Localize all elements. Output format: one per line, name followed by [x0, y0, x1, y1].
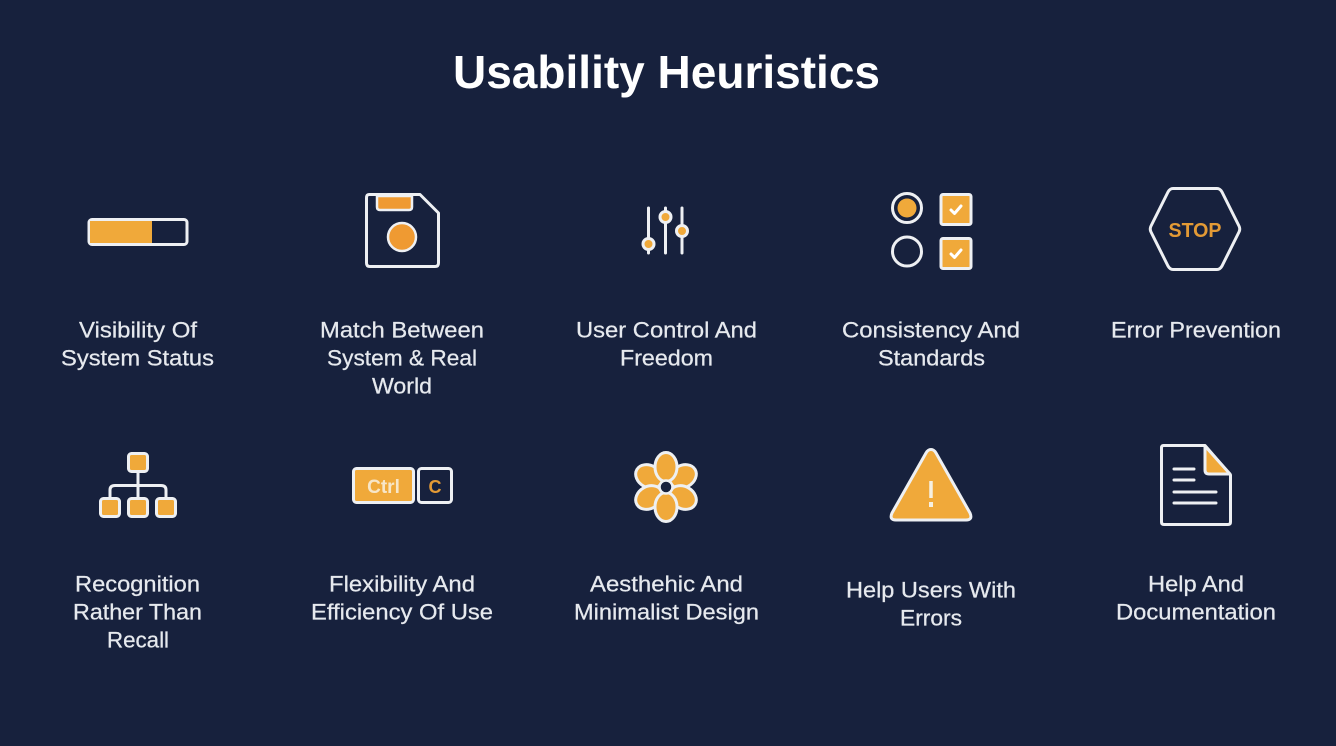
- label: aesthetic and minimalist design: [574, 572, 759, 624]
- icon: flower: [631, 452, 701, 522]
- label: help users with errors: Errors: [900, 606, 962, 630]
- label: visibility of system status: Visibility Of: [79, 318, 198, 342]
- label: match between system and real world: Match Between: [320, 318, 484, 342]
- label: help users with errors: [846, 578, 1016, 630]
- label: flexibility and efficiency of use: Flexibility And: [329, 572, 475, 596]
- label: match between system and real world: World: [372, 374, 432, 398]
- icon: stop sign: [1150, 188, 1240, 270]
- label: aesthetic and minimalist design: Aesthehic And: [590, 572, 743, 596]
- label: recognition rather than recall: [73, 572, 202, 652]
- label: user control and freedom: [576, 318, 757, 370]
- label: consistency and standards: [842, 318, 1020, 370]
- label: visibility of system status: System Status: [61, 346, 214, 370]
- label: help users with errors: Help Users With: [846, 578, 1016, 602]
- label: match between system and real world: [320, 318, 484, 398]
- icon: warning triangle: [891, 450, 971, 520]
- label: help and documentation: Documentation: [1116, 600, 1276, 624]
- label: flexibility and efficiency of use: Efficiency Of Use: [311, 600, 493, 624]
- icon: ctrl c keys: [354, 468, 452, 502]
- icon: radios and checkboxes: [892, 194, 971, 268]
- label: consistency and standards: Consistency And: [842, 318, 1020, 342]
- label: help and documentation: [1116, 572, 1276, 624]
- label: recognition rather than recall: Recognition: [75, 572, 200, 596]
- icon: progress bar: [89, 220, 187, 244]
- label: recognition rather than recall: Rather Than: [73, 600, 202, 624]
- icon: hierarchy: [100, 454, 176, 516]
- icon: stop sign: STOP: [1168, 220, 1222, 242]
- label: error prevention: Error Prevention: [1111, 318, 1281, 342]
- label: match between system and real world: System & Real: [327, 346, 477, 370]
- icon: floppy disk: [366, 194, 438, 266]
- label: recognition rather than recall: Recall: [107, 628, 169, 652]
- label: user control and freedom: User Control And: [576, 318, 757, 342]
- label: help and documentation: Help And: [1148, 572, 1244, 596]
- label: user control and freedom: Freedom: [620, 346, 713, 370]
- icon: document: [1162, 446, 1230, 524]
- icon: ctrl c keys: C: [428, 477, 442, 497]
- icon: sliders: [643, 208, 688, 253]
- label: aesthetic and minimalist design: Minimalist Design: [574, 600, 759, 624]
- label: flexibility and efficiency of use: [311, 572, 493, 624]
- title: Usability Heuristics: [453, 46, 880, 98]
- label: visibility of system status: [61, 318, 214, 370]
- label: consistency and standards: Standards: [878, 346, 985, 370]
- icon: ctrl c keys: Ctrl: [367, 477, 400, 498]
